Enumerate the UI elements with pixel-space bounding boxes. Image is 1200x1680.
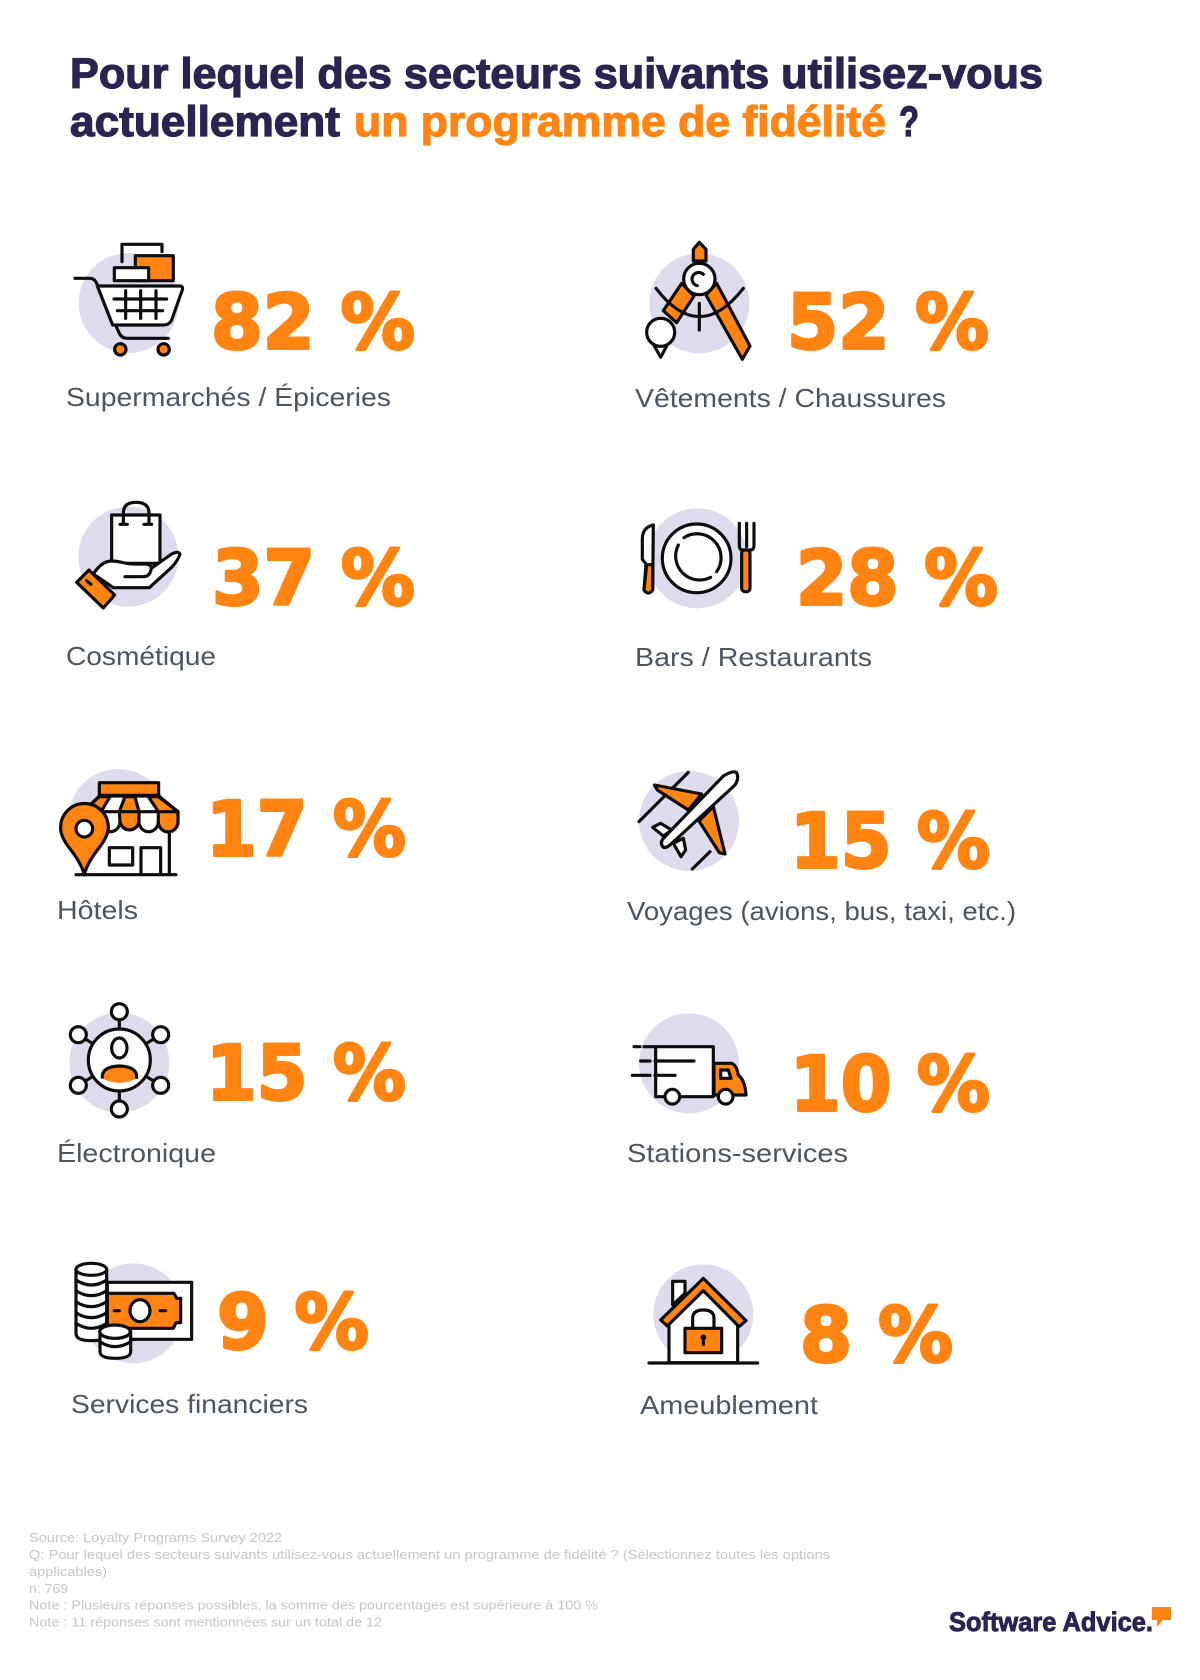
label: Vêtements / Chaussures <box>635 383 946 413</box>
panel: Ameublement <box>640 1264 953 1420</box>
icon: shop with location pin <box>61 769 178 875</box>
title: ? <box>899 98 919 146</box>
percentage: 17 %: 17 % <box>206 784 406 874</box>
panel: Supermarchés / Épiceries <box>66 244 415 412</box>
label: Supermarchés / Épiceries <box>66 382 391 412</box>
label: Cosmétique <box>66 641 216 671</box>
title: actuellement <box>70 98 340 146</box>
icon: airplane <box>639 771 739 871</box>
panel: Électronique <box>57 1004 406 1168</box>
source notes: Q: Pour lequel des secteurs suivants utilisez-vous actuellement un programme de fidélité ? (Sélectionnez toutes les options <box>29 1547 831 1562</box>
title: Pour lequel des secteurs suivants utilisez-vous <box>70 50 1043 98</box>
percentage: 15 %: 15 % <box>790 796 990 886</box>
label: Ameublement <box>640 1390 819 1420</box>
source notes: n: 769 <box>29 1581 68 1596</box>
icon: network of people <box>69 1004 169 1117</box>
title <box>70 50 1043 146</box>
percentage: 9 %: 9 % <box>217 1278 369 1366</box>
panel: Bars / Restaurants <box>635 508 998 672</box>
icon: delivery truck <box>632 1013 746 1113</box>
source notes: Note : 11 réponses sont mentionnées sur un total de 12 <box>29 1614 382 1630</box>
panel: Vêtements / Chaussures <box>635 242 989 413</box>
icon: shopping cart <box>75 244 183 355</box>
source notes: applicables) <box>29 1564 107 1579</box>
source notes: Note : Plusieurs réponses possibles, la somme des pourcentages est supérieure à 100 % <box>29 1598 598 1612</box>
percentage: 52 %: 52 % <box>787 278 989 366</box>
label: Électronique <box>57 1138 216 1168</box>
label: Services financiers <box>71 1389 308 1419</box>
icon: house with padlock <box>649 1264 758 1364</box>
percentage: 37 %: 37 % <box>212 534 415 622</box>
label: Voyages (avions, bus, taxi, etc.) <box>627 896 1016 926</box>
label: Stations-services <box>627 1138 848 1168</box>
source notes: Source: Loyalty Programs Survey 2022 <box>29 1530 282 1545</box>
icon: drawing compass <box>647 242 750 359</box>
panel: Services financiers <box>71 1263 369 1419</box>
icon: hand holding bag <box>77 502 180 608</box>
source notes <box>29 1530 831 1630</box>
panel: Voyages <box>627 771 1016 926</box>
panel: Stations-services <box>627 1013 990 1168</box>
percentage: 15 %: 15 % <box>206 1028 406 1118</box>
icon: banknote and coins <box>76 1263 192 1363</box>
percentage: 28 %: 28 % <box>796 534 998 622</box>
panel: Hôtels <box>57 769 406 925</box>
icon: plate and cutlery <box>642 508 754 608</box>
panel: Cosmétique <box>66 502 415 671</box>
logo: Software Advice: Software Advice. <box>949 1607 1153 1637</box>
title: un programme de fidélité <box>354 98 886 146</box>
percentage: 10 %: 10 % <box>790 1040 990 1128</box>
label: Bars / Restaurants <box>635 642 872 672</box>
percentage: 8 %: 8 % <box>800 1290 953 1380</box>
percentage: 82 %: 82 % <box>211 278 415 366</box>
label: Hôtels <box>57 895 138 925</box>
